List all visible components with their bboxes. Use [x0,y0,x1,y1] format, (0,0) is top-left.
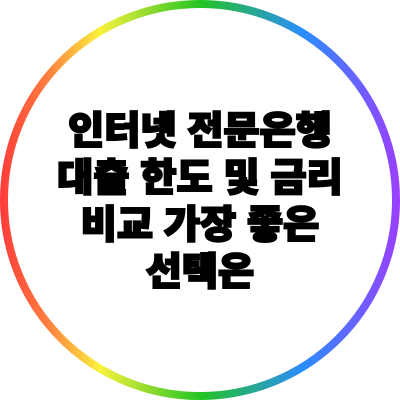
title: 선택은 [146,251,254,294]
title: 대출 한도 및 금리 [57,157,343,200]
title: 비교 가장 좋은 [81,204,319,247]
title [57,110,343,294]
title: 인터넷 전문은행 [68,110,332,153]
